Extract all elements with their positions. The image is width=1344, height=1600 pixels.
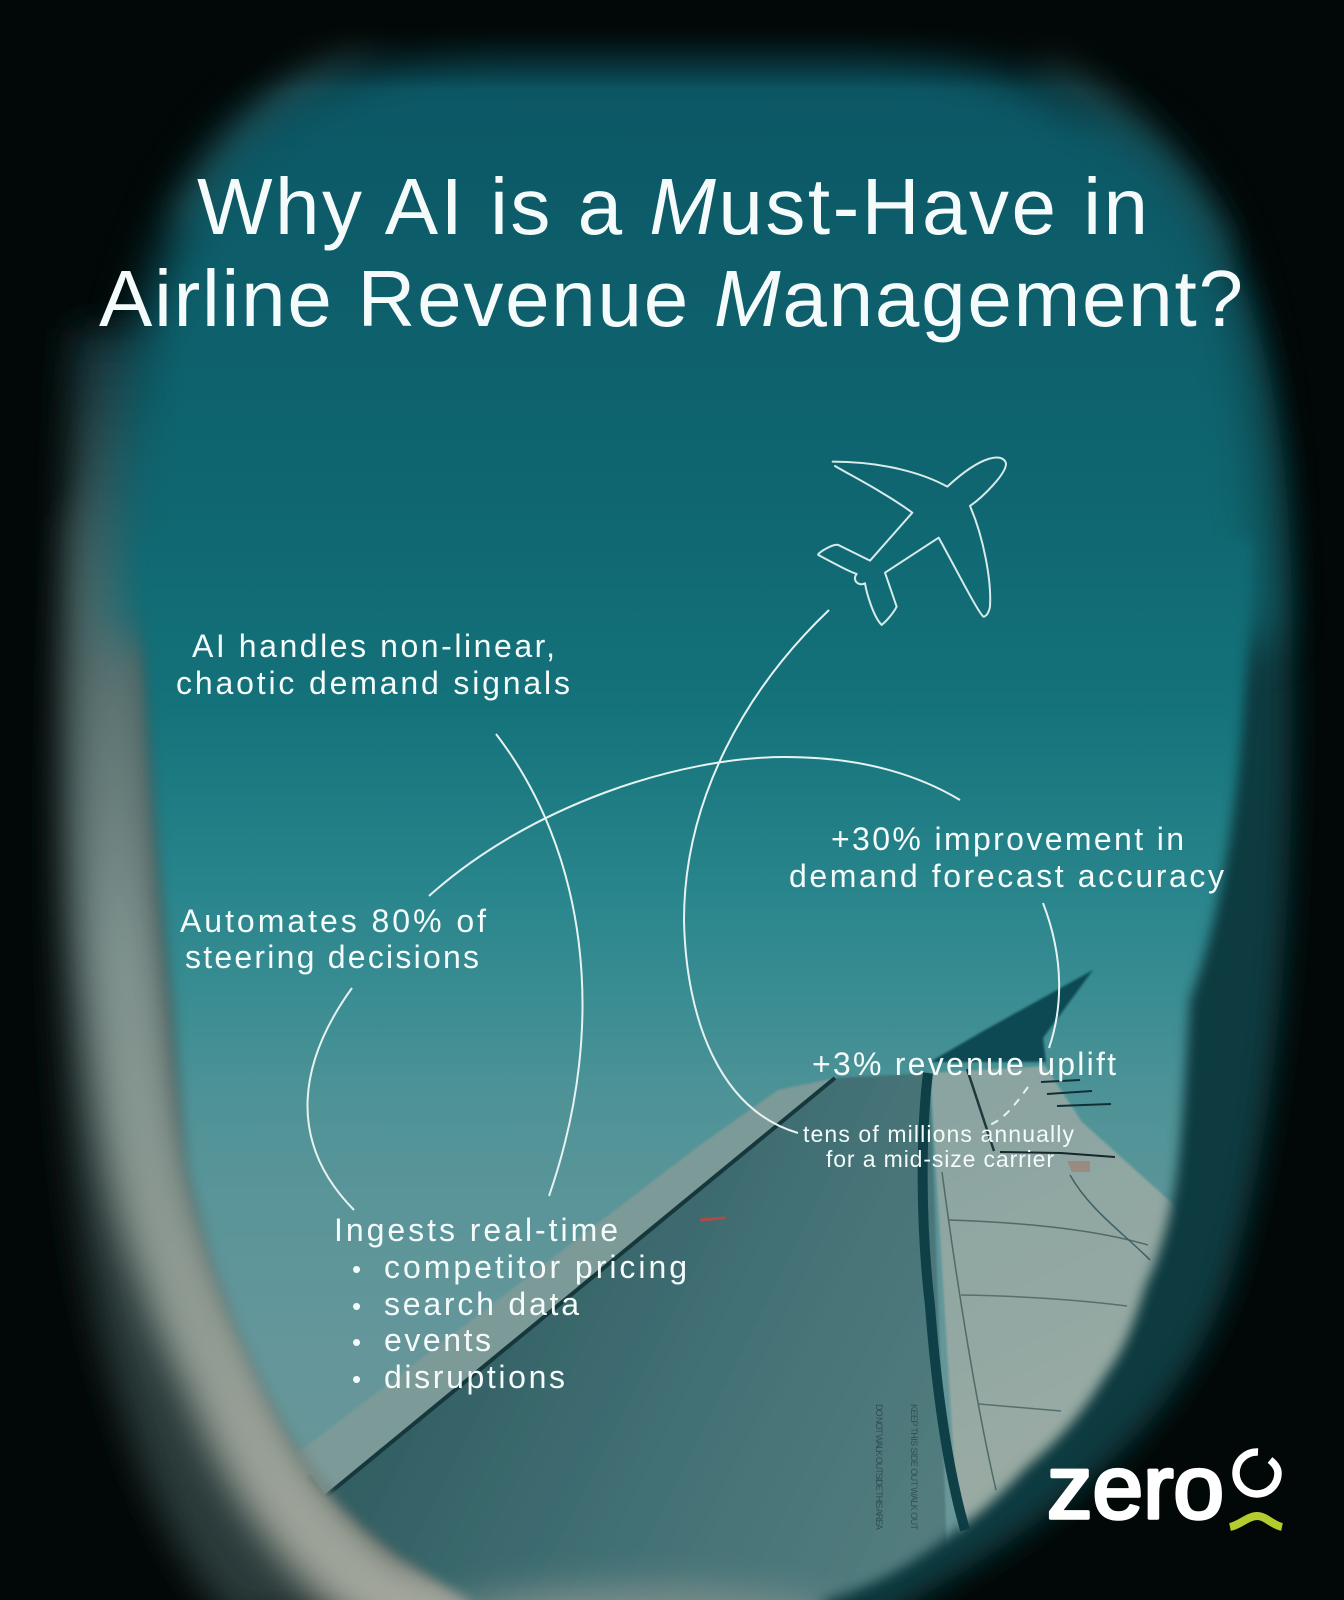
text: annual value [803, 1121, 1074, 1172]
connector arc: steering to forecast [429, 757, 960, 896]
title: Airline Revenue Management? [99, 254, 1243, 343]
text: real-time inputs list: • [352, 1291, 361, 1321]
wing dark panel [250, 1073, 950, 1600]
top right frame streak [1040, 60, 1215, 260]
text: annual value: for a mid-size carrier [826, 1146, 1054, 1172]
text: real-time inputs list [334, 1212, 687, 1395]
airplane outline icon [818, 458, 1006, 625]
logo ring [1236, 1452, 1278, 1494]
text: real-time inputs list: search data [384, 1286, 579, 1322]
wing panel lines [700, 1069, 1150, 1490]
title: Why AI is a Must-Have in [197, 162, 1148, 251]
text: real-time inputs list: events [384, 1322, 491, 1358]
text: non-linear demand: chaotic demand signals [176, 665, 570, 701]
text: real-time inputs list: disruptions [384, 1359, 565, 1395]
logo: zeroG: zero [1047, 1438, 1224, 1538]
text: steering decisions [180, 903, 486, 975]
title [99, 162, 1243, 343]
text: steering decisions: Automates 80% of [180, 903, 486, 939]
dark strip [923, 1073, 965, 1530]
text: real-time inputs list: • [352, 1327, 361, 1357]
text: forecast accuracy [789, 821, 1224, 894]
bottom grey haze [450, 1588, 830, 1600]
dark spar line [326, 1078, 835, 1496]
text: steering decisions: steering decisions [185, 939, 479, 975]
right dark teal surround [800, 120, 1292, 1600]
connector curve: demand signals to ingests [496, 734, 583, 1196]
connector curve: ingests to steering [307, 988, 354, 1210]
text: real-time inputs list: competitor pricing [384, 1249, 687, 1285]
text: real-time inputs list: • [352, 1254, 361, 1284]
text: revenue uplift: +3% revenue uplift [812, 1046, 1116, 1082]
text: forecast accuracy: +30% improvement in [831, 821, 1184, 857]
wing stencil text: KEEP THIS SIDE OUT WALK OUT [909, 1404, 919, 1530]
text: real-time inputs list: • [352, 1364, 361, 1394]
wing light panel [930, 1065, 1176, 1534]
top fade [0, 0, 1344, 90]
connector curve: forecast to revenue [1043, 903, 1059, 1048]
flight trail curve [684, 610, 829, 1133]
logo chevron [1230, 1516, 1282, 1527]
text: non-linear demand: AI handles non-linear, [192, 628, 555, 664]
text: annual value: tens of millions annually [803, 1121, 1074, 1147]
wing stencil text [874, 1404, 919, 1530]
top left frame streak [190, 35, 375, 230]
wing leading strip [295, 1078, 835, 1496]
left dim surround [61, 400, 560, 1600]
winglet [930, 970, 1093, 1062]
text: real-time inputs list: Ingests real-time [334, 1212, 618, 1248]
text: forecast accuracy: demand forecast accuracy [789, 858, 1224, 894]
grey window frame band [113, 330, 560, 1600]
dashed connector: revenue to annual value [990, 1087, 1028, 1125]
text: non-linear demand [176, 628, 570, 701]
wing stencil text: DO NOT WALK OUTSIDE THIS AREA [874, 1404, 884, 1530]
